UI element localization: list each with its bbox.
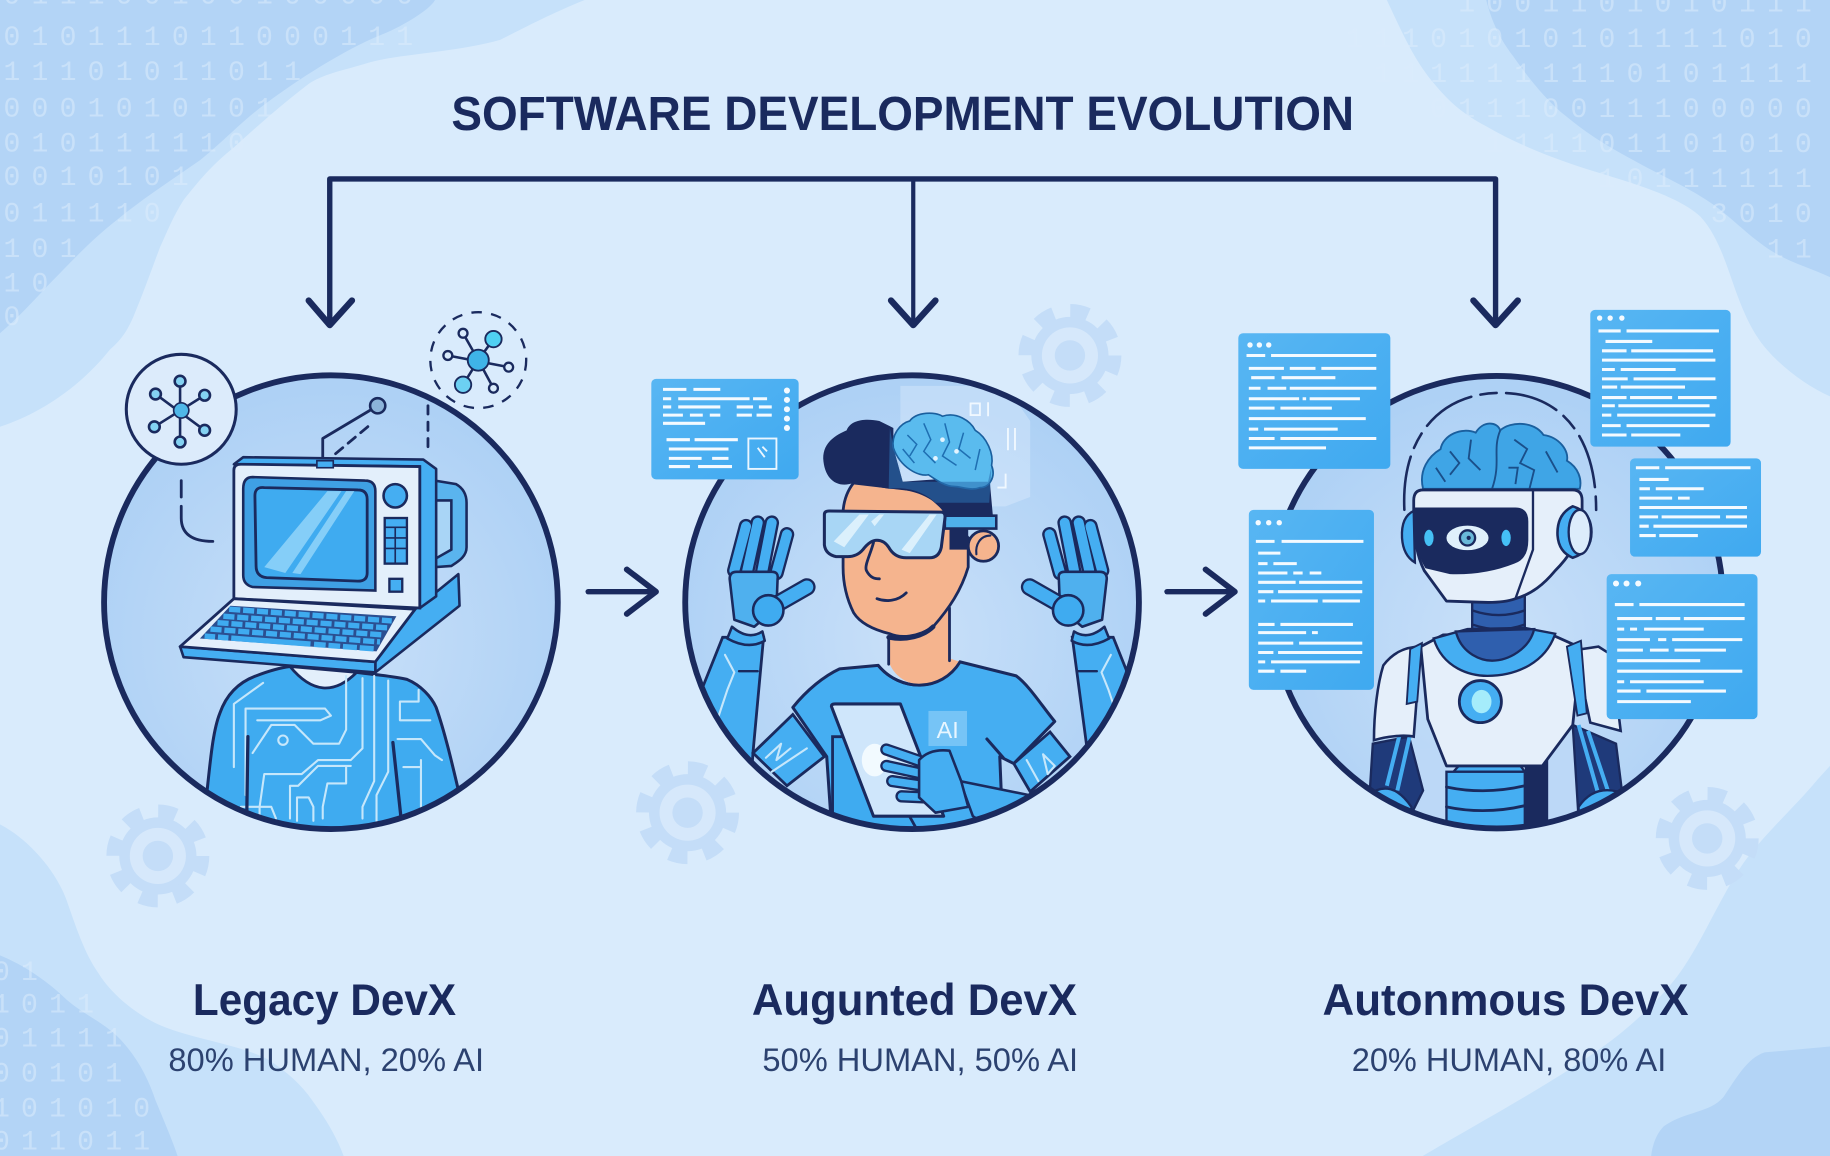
arrow: augmented to autonomous (1167, 569, 1235, 614)
robot hand on tablet (886, 750, 1029, 830)
monitor controls (384, 484, 407, 507)
robot neck (1471, 596, 1526, 628)
right forearm (1070, 636, 1126, 744)
figure contents (703, 386, 1126, 826)
label: augmented devx: Augunted DevX (752, 976, 1077, 1025)
computer antenna (323, 406, 378, 458)
robot abdomen (1445, 760, 1548, 826)
label: legacy devx: 80% HUMAN, 20% AI (168, 1041, 484, 1078)
gear icon: lower middle (644, 769, 731, 856)
lower arm left (753, 714, 824, 786)
binary digits: top-left: 0 (4, 303, 32, 334)
label: autonomous devx (1323, 976, 1689, 1078)
dashed connector left (181, 481, 213, 541)
badge: AI (928, 711, 967, 746)
neck and face (888, 610, 958, 684)
keyboard deck (180, 647, 375, 672)
robot hip plates (1409, 748, 1579, 842)
binary digits: top-left: 0001010101 (4, 95, 284, 126)
background blobs: bottom-right (1422, 766, 1830, 1156)
autonomous circle background (1270, 375, 1724, 829)
dashed halo arc (1404, 393, 1596, 510)
panel: autonomous devx illustration (1238, 310, 1761, 842)
icon: network hub in dashed ring (430, 312, 526, 408)
badge: AI: AI (937, 717, 959, 743)
binary digits: bottom-left (0, 958, 161, 1156)
jaw shadow (889, 627, 933, 638)
label: legacy devx (168, 976, 484, 1078)
lower arm right (1014, 732, 1070, 792)
robot helmet (1402, 490, 1591, 602)
robotic hand right (1030, 523, 1109, 645)
brain exposed (889, 413, 993, 503)
binary digits: top-right: 3010 (1711, 200, 1823, 231)
goggles (824, 511, 996, 558)
retro computer head (180, 398, 467, 672)
hands group (727, 523, 1109, 645)
connector with three down arrows (309, 179, 1518, 325)
binary digits: top-right: 01110011100000 (1430, 95, 1823, 126)
panel: augmented devx illustration (651, 375, 1158, 842)
label: legacy devx: Legacy DevX (193, 976, 456, 1025)
augmented circle outline (685, 375, 1139, 829)
binary digits: top-right: 11 (1767, 235, 1823, 266)
code panel C (1590, 310, 1731, 447)
binary digits: top-left: 0010101 (4, 163, 200, 194)
code panel E (1607, 574, 1758, 719)
label: augmented devx (752, 976, 1078, 1078)
legacy circle background (104, 375, 558, 829)
binary digits: top-left (4, 0, 424, 334)
binary digits: top-left: 11101011011 (4, 58, 312, 89)
robot collar (1434, 628, 1555, 676)
binary digits: top-left: 010111110 (4, 130, 256, 161)
binary digits: top-right: 11101010101111010 (1346, 25, 1823, 56)
gear icon: lower left (115, 813, 201, 899)
background blobs: top-right (1387, 0, 1830, 396)
binary digits: top-right: 1111111110101111 (1374, 60, 1823, 91)
label: autonomous devx: 20% HUMAN, 80% AI (1352, 1041, 1666, 1078)
shirt (793, 662, 1055, 842)
monitor bezel and screen (243, 477, 375, 591)
robot figure (1368, 393, 1628, 842)
computer back handle (435, 481, 467, 567)
tablet (831, 704, 944, 842)
robot brain (1422, 424, 1580, 489)
augmented circle background (685, 375, 1139, 829)
robot arms (1368, 737, 1423, 819)
robot eye (1446, 526, 1489, 550)
hair (823, 420, 993, 515)
holographic panel behind brain (900, 386, 1030, 506)
robot visor (1414, 507, 1528, 574)
floating code panel (651, 379, 799, 479)
binary digits: top-left: 10 (4, 270, 60, 301)
left forearm (703, 636, 766, 761)
hand caps (1376, 788, 1617, 810)
code panel A (1238, 333, 1390, 469)
robotic hand left (727, 523, 807, 645)
arrow: legacy to augmented (588, 569, 656, 614)
robot shoulders (1374, 647, 1421, 740)
background blobs: top-left (0, 0, 585, 427)
code panel D (1630, 458, 1761, 557)
binary digits: top-right (1346, 0, 1823, 266)
gear icon: upper middle (1027, 312, 1113, 399)
robot torso (1421, 633, 1581, 766)
robot left ear (1402, 511, 1415, 562)
ear (968, 531, 999, 561)
icon: network hub in circle (126, 354, 236, 464)
legacy circle outline (104, 375, 558, 829)
monitor casing (234, 457, 436, 608)
base side (375, 574, 460, 672)
panel: legacy devx illustration (104, 312, 558, 842)
binary digits: top-right: 111101101010 (1486, 130, 1823, 161)
title: SOFTWARE DEVELOPMENT EVOLUTION (451, 88, 1354, 141)
person with circuit shirt (206, 666, 459, 826)
binary digits: top-right: 10111111 (1599, 165, 1823, 196)
autonomous circle outline (1270, 376, 1723, 828)
gear icon: lower right (1664, 795, 1750, 882)
robot chest core (1459, 681, 1501, 723)
code panel B (1249, 510, 1374, 690)
dashed connector right (427, 406, 429, 449)
binary digits: top-left: 010111011000111 (4, 23, 424, 54)
background blobs: bottom-left (0, 824, 344, 1156)
label: autonomous devx: Autonmous DevX (1323, 976, 1689, 1025)
binary digits: top-left: 101 (4, 235, 88, 266)
binary digits: top-left: 011110 (4, 200, 172, 231)
nose and smile (866, 543, 906, 601)
label: augmented devx: 50% HUMAN, 50% AI (762, 1041, 1078, 1078)
robot headphone (1557, 506, 1591, 558)
